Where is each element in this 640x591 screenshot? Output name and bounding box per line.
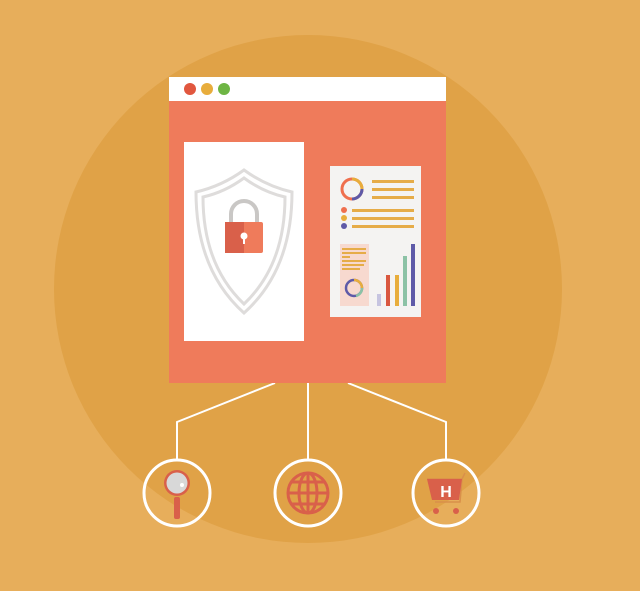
- icon: search: [144, 460, 210, 526]
- bar chart: [377, 244, 415, 306]
- background circle: [54, 35, 562, 543]
- icon: padlock: [225, 201, 263, 253]
- browser window: [169, 77, 446, 383]
- connector lines: [177, 383, 446, 460]
- panel: security: [184, 142, 304, 341]
- icon: shopping cart: [413, 460, 479, 526]
- panel: report: [330, 166, 421, 317]
- donut chart: [342, 179, 362, 199]
- icon: shield: [196, 170, 292, 313]
- icon: globe: [275, 460, 341, 526]
- icon: shopping cart: H: [440, 484, 452, 501]
